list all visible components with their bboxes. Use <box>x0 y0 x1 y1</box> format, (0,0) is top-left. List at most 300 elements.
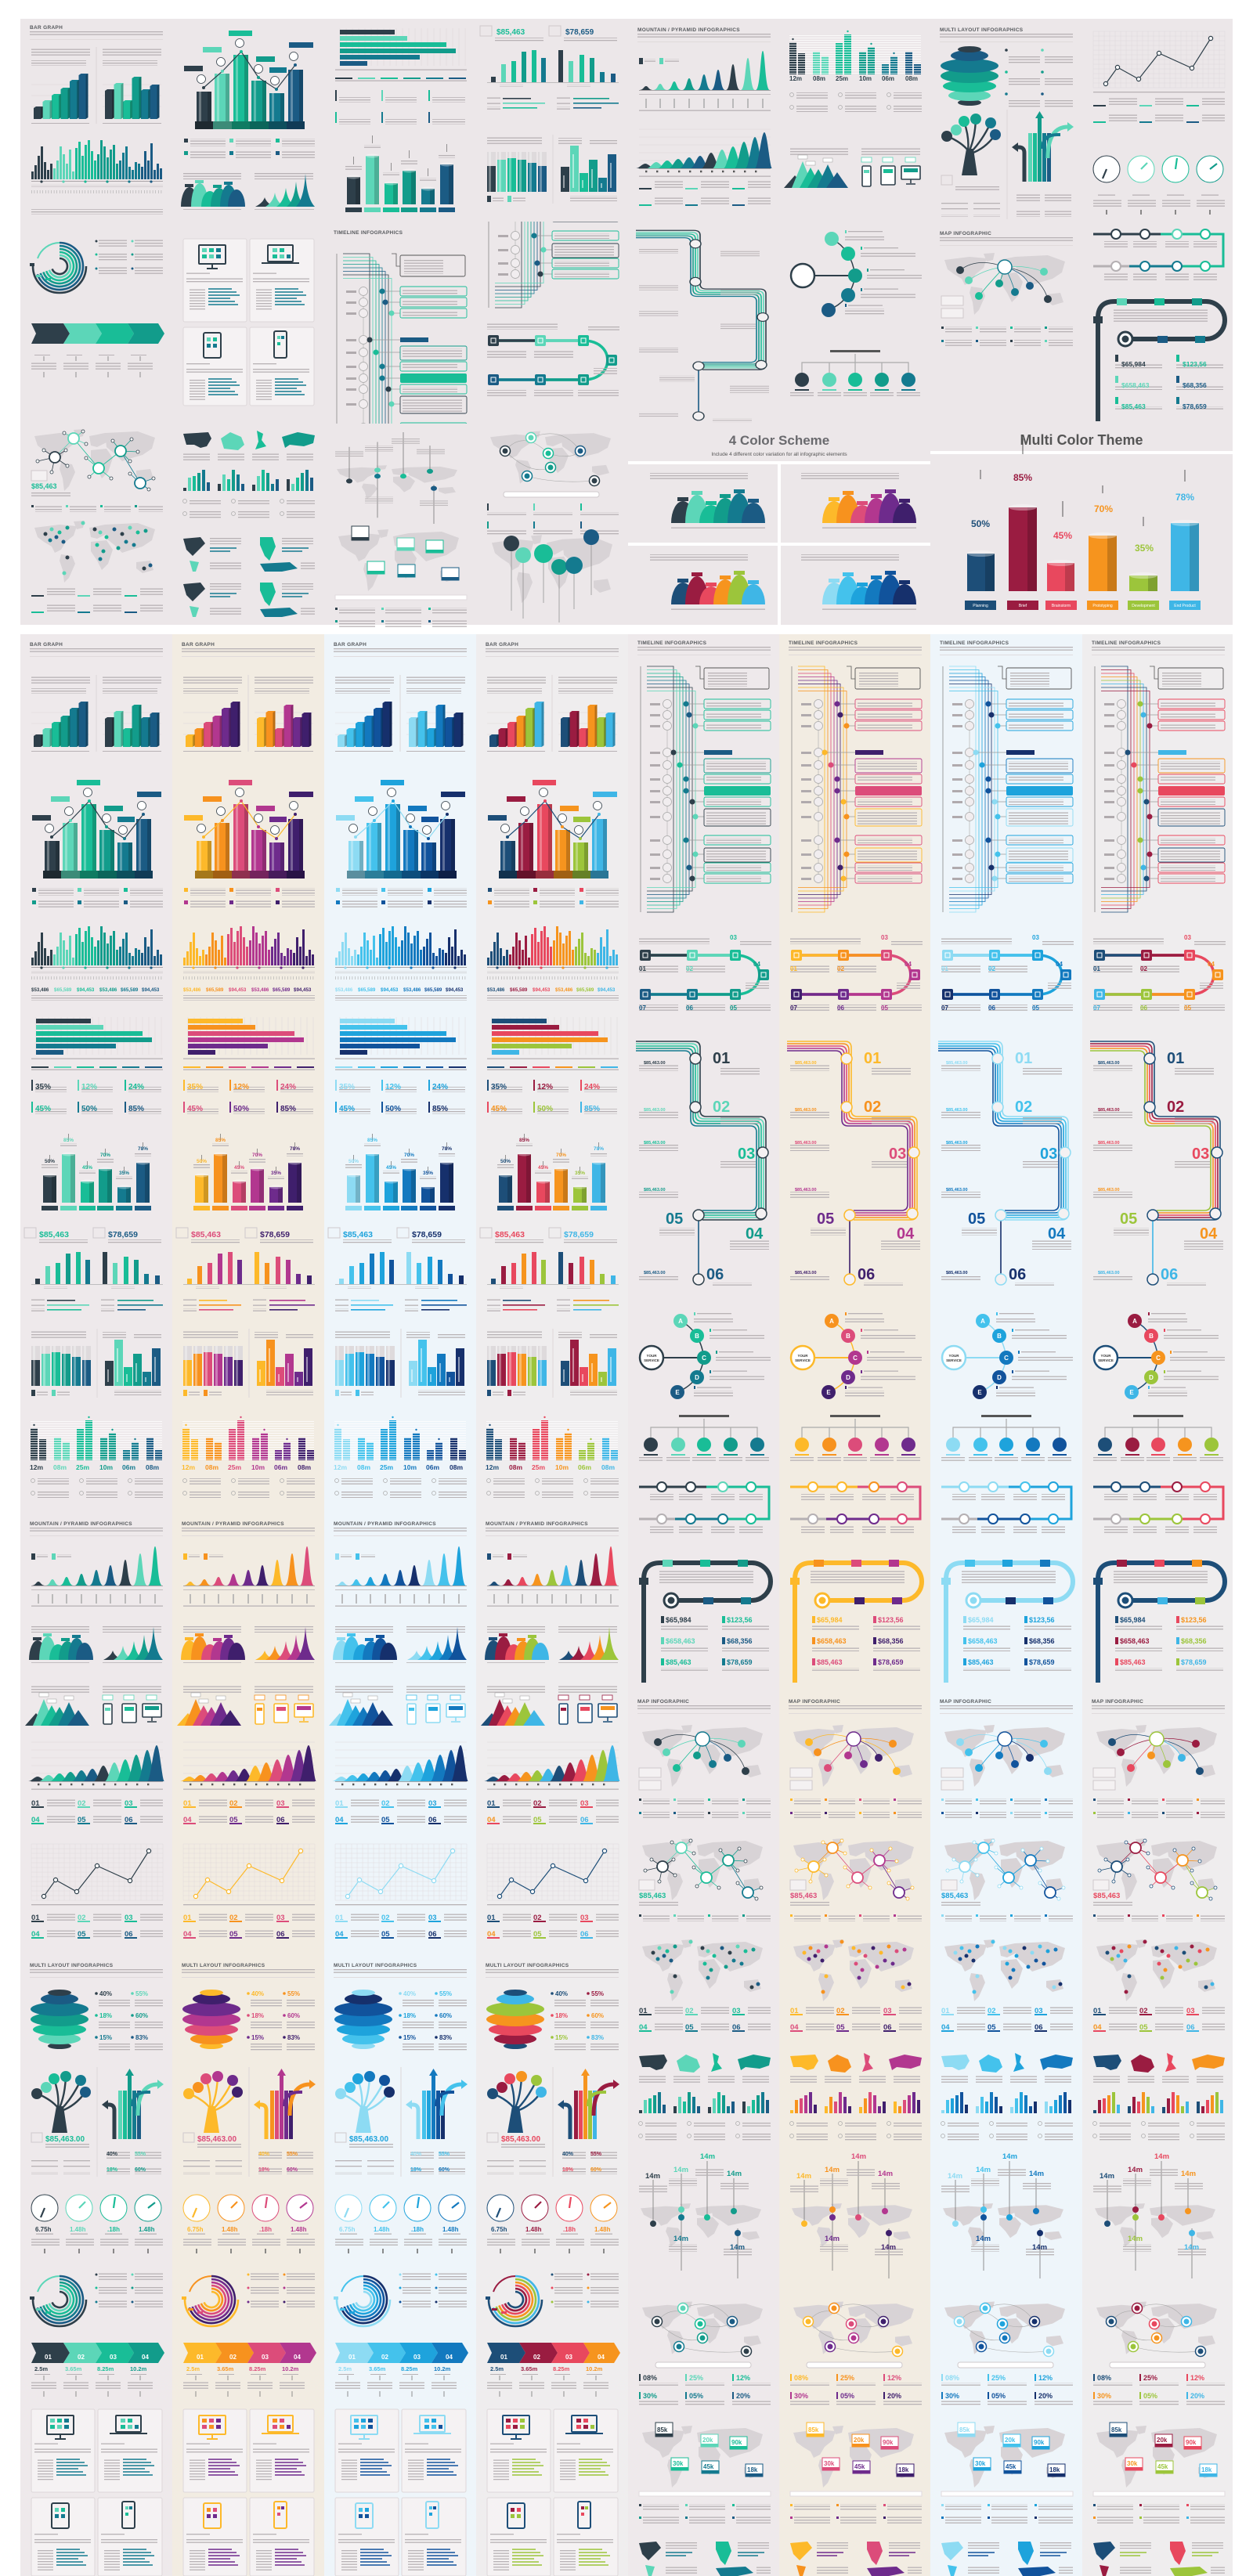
map tag values: 20k <box>854 2437 865 2444</box>
category numbers: 05 <box>836 2023 845 2032</box>
preview: concentric arcs <box>30 240 163 293</box>
map tag values: 18k <box>898 2466 909 2473</box>
chart: mountain range <box>180 1742 316 1790</box>
chart: process pipeline <box>639 937 771 1012</box>
preview network value: $85,463 <box>31 482 57 490</box>
equalizer labels: 08m <box>601 1463 615 1471</box>
category numbers: 03 <box>428 1799 437 1808</box>
chart: tree and arrows <box>487 2067 619 2177</box>
chevron values: 2.5m <box>490 2365 504 2372</box>
tree value: $85,463.00 <box>197 2135 237 2144</box>
pipeline numbers: 01 <box>639 965 646 972</box>
column backgrounds <box>20 634 1233 2576</box>
roadmap numbers: 03 <box>1040 1145 1057 1163</box>
chart: money bars <box>328 1228 467 1311</box>
category numbers: 03 <box>580 1799 589 1808</box>
lantern values: 40% <box>403 1990 416 1997</box>
chart: gauges <box>183 2195 315 2253</box>
category numbers: 05 <box>229 1816 238 1824</box>
category numbers: 06 <box>883 2023 892 2032</box>
tree value: $85,463.00 <box>349 2135 388 2144</box>
heading: bar graph: BAR GRAPH <box>334 642 367 648</box>
preview: mountain intro <box>637 33 771 42</box>
pin labels: 14m <box>796 2172 811 2181</box>
lantern values: 55% <box>135 1990 148 1997</box>
heading: map: MAP INFOGRAPHIC <box>637 1699 689 1705</box>
map tag values: 20k <box>1157 2437 1168 2444</box>
heading: multi layout: MULTI LAYOUT INFOGRAPHICS <box>30 1963 114 1968</box>
chart: cylinders <box>193 1134 303 1210</box>
heading: map preview: MAP INFOGRAPHIC <box>940 231 991 236</box>
lantern values: 83% <box>287 2034 300 2041</box>
heading: bar graph: BAR GRAPH <box>30 642 63 648</box>
map tag values: 90k <box>1034 2439 1045 2446</box>
percentage values: 50% <box>385 1105 401 1113</box>
flight percentages: 25% <box>1143 2374 1157 2382</box>
panel: warm dome chart <box>801 473 916 529</box>
pipeline numbers: 02 <box>686 965 693 972</box>
heading: mountain: MOUNTAIN / PYRAMID INFOGRAPHICS <box>182 1521 284 1527</box>
values row: $53,486 <box>555 987 573 993</box>
equalizer labels: 08m <box>357 1463 370 1471</box>
arrow values: 55% <box>590 2152 602 2157</box>
chart: continents <box>941 2542 1073 2576</box>
category numbers: 06 <box>1035 2023 1043 2032</box>
category numbers: 04 <box>31 1816 40 1824</box>
chart: 3D bars <box>183 675 313 752</box>
money values: $85,463 <box>39 1230 69 1239</box>
preview: bubble map <box>492 529 612 622</box>
preview equalizer labels: 08m <box>813 75 825 82</box>
cylinder percentages: 85% <box>63 1138 74 1143</box>
arrow values: 40% <box>410 2152 422 2157</box>
category numbers: 05 <box>381 1930 390 1939</box>
money values: $85,463 <box>191 1230 221 1239</box>
chart: network map <box>790 1838 922 1921</box>
roadmap numbers: 05 <box>1120 1210 1137 1228</box>
category numbers: 05 <box>533 1930 542 1939</box>
map tag values: 45k <box>1006 2463 1016 2470</box>
chevron values: 8.25m <box>401 2365 418 2372</box>
money values: $78,659 <box>108 1230 138 1239</box>
values row: $53,486 <box>403 987 421 993</box>
preview equalizer labels: 06m <box>882 75 894 82</box>
chart: 85k map <box>639 2423 771 2524</box>
chart: flight map <box>639 2302 771 2405</box>
pin labels: 14m <box>948 2172 962 2181</box>
timeline intro <box>637 646 771 655</box>
pipeline numbers: 07 <box>941 1005 948 1012</box>
chart: pillar callouts <box>32 780 163 908</box>
percentage values: 12% <box>537 1083 553 1091</box>
values row: $94,453 <box>598 987 616 993</box>
category numbers: 04 <box>335 1930 344 1939</box>
lantern values: 60% <box>135 2012 148 2019</box>
pipeline numbers: 04 <box>1208 961 1215 968</box>
chart: equalizer <box>334 1416 467 1498</box>
equalizer labels: 12m <box>334 1463 347 1471</box>
roadmap values: $85,463.00 <box>946 1061 968 1066</box>
chart: track <box>1093 1560 1225 1683</box>
category numbers: 04 <box>1093 2023 1102 2032</box>
panel: teal dome chart <box>650 473 765 529</box>
track values: $65,984 <box>666 1616 691 1624</box>
category numbers: 02 <box>381 1799 390 1808</box>
chart: vertical timeline <box>943 666 1073 912</box>
gauge values: 1.48h <box>594 2226 611 2233</box>
flight percentages: 12% <box>1038 2374 1053 2382</box>
preview: money tree and arrows <box>941 110 1074 219</box>
roadmap numbers: 06 <box>1009 1266 1026 1283</box>
lantern values: 60% <box>287 2012 300 2019</box>
preview: multi layout intro <box>940 33 1073 42</box>
preview equalizer labels: 12m <box>789 75 802 82</box>
chart: 85k map <box>1093 2423 1225 2524</box>
intro text <box>182 648 315 657</box>
chart: process pipeline <box>790 937 923 1012</box>
equalizer labels: 12m <box>486 1463 499 1471</box>
track values: $85,463 <box>817 1658 843 1666</box>
service letters: B <box>846 1333 850 1340</box>
preview: continents <box>183 537 315 572</box>
category numbers: 01 <box>1093 2007 1102 2015</box>
percentage values: 85% <box>280 1105 296 1113</box>
pin labels: 14m <box>1181 2170 1196 2178</box>
network value: $85,463 <box>941 1892 968 1900</box>
service letters: E <box>1129 1389 1134 1396</box>
lantern values: 40% <box>99 1990 112 1997</box>
percentage grid <box>31 1080 161 1114</box>
pipeline numbers: 05 <box>730 1005 737 1012</box>
percentage values: 12% <box>81 1083 97 1091</box>
multi intro <box>30 1968 163 1978</box>
values row: $53,486 <box>31 987 49 993</box>
pin labels: 14m <box>645 2172 660 2181</box>
panel: column 3 blue charts <box>328 642 468 2576</box>
chart: pin map <box>639 2161 761 2278</box>
chart: horizontal bars <box>335 1017 467 1071</box>
category numbers: 02 <box>836 2007 845 2015</box>
percentage grid <box>335 1080 465 1114</box>
preview: team hierarchy <box>790 350 920 397</box>
chart: snake roadmap <box>636 1041 769 1287</box>
pin labels: 14m <box>1184 2243 1199 2252</box>
percentage values: 24% <box>432 1083 448 1091</box>
equalizer labels: 25m <box>76 1463 89 1471</box>
gauge values: 1.48h <box>374 2226 390 2233</box>
pipeline numbers: 03 <box>881 934 888 941</box>
chart: lantern <box>486 1990 619 2051</box>
values row: $53,486 <box>251 987 269 993</box>
heading: map: MAP INFOGRAPHIC <box>789 1699 840 1705</box>
category numbers: 03 <box>1186 2007 1195 2015</box>
categories <box>31 1799 163 1824</box>
chart: device mountains <box>25 1686 161 1726</box>
equalizer labels: 06m <box>578 1463 591 1471</box>
category numbers: 04 <box>183 1930 192 1939</box>
chevron labels: 03 <box>565 2354 572 2361</box>
lantern values: 15% <box>555 2034 568 2041</box>
equalizer labels: 08m <box>146 1463 159 1471</box>
chart: horizontal bars <box>31 1017 163 1071</box>
chart: lantern <box>182 1990 315 2051</box>
pin labels: 14m <box>1100 2172 1114 2181</box>
pipeline numbers: 05 <box>881 1005 888 1012</box>
chart: pin map <box>941 2161 1063 2278</box>
category numbers: 02 <box>533 1799 542 1808</box>
heading: timeline: TIMELINE INFOGRAPHICS <box>1092 640 1161 646</box>
chart: track <box>639 1560 771 1683</box>
network value: $85,463 <box>1093 1892 1120 1900</box>
lantern values: 60% <box>439 2012 452 2019</box>
chart: pillar callouts <box>488 780 619 908</box>
arrow values: 60% <box>439 2167 450 2173</box>
panel: blue dome chart <box>801 554 916 611</box>
preview equalizer labels: 10m <box>859 75 872 82</box>
roadmap numbers: 03 <box>889 1145 906 1163</box>
panel: column 5 teal timelines and maps <box>636 640 771 2576</box>
intro text <box>486 648 619 657</box>
category numbers: 03 <box>276 1914 285 1922</box>
service labels: YOUR <box>948 1354 959 1358</box>
lantern values: 55% <box>287 1990 300 1997</box>
cylinder percentages: 50% <box>348 1159 359 1164</box>
pin labels: 14m <box>825 2235 840 2243</box>
arrow values: 18% <box>562 2167 574 2173</box>
service labels: SERVICE <box>1098 1358 1114 1362</box>
arrow values: 60% <box>287 2167 298 2173</box>
values row: $94,453 <box>77 987 95 993</box>
map tag values: 85k <box>808 2426 819 2433</box>
cylinder percentages: 70% <box>556 1153 566 1158</box>
mountain intro <box>486 1527 619 1536</box>
gauge values: 6.75h <box>187 2226 204 2233</box>
roadmap values: $85,463.00 <box>946 1141 968 1145</box>
heading: mountain preview: MOUNTAIN / PYRAMID INFOGRAPHICS <box>637 27 740 33</box>
percentage values: 35% <box>35 1083 51 1091</box>
roadmap numbers: 04 <box>746 1225 764 1243</box>
heading: mountain: MOUNTAIN / PYRAMID INFOGRAPHICS <box>486 1521 588 1527</box>
preview: phase chevrons <box>31 323 164 377</box>
pipeline numbers: 06 <box>686 1005 693 1012</box>
pin labels: 14m <box>878 2170 893 2178</box>
equalizer labels: 10m <box>403 1463 417 1471</box>
chevron labels: 01 <box>45 2354 52 2361</box>
chart: horizontal bars <box>183 1017 315 1071</box>
mountain intro <box>182 1527 315 1536</box>
pin labels: 14m <box>673 2166 688 2174</box>
lantern values: 83% <box>135 2034 148 2041</box>
chart: dense bars <box>183 926 315 1001</box>
panel: column 4 multi-color charts <box>480 642 620 2576</box>
chart: tree and arrows <box>31 2067 164 2177</box>
chart: dense bars <box>31 926 163 1001</box>
category numbers: 03 <box>580 1914 589 1922</box>
preview: device panels <box>183 239 314 406</box>
chart: 85k map <box>941 2423 1073 2524</box>
roadmap values: $85,463.00 <box>946 1108 968 1113</box>
preview: percentage grid <box>335 90 465 124</box>
preview: lantern discs <box>941 46 1073 107</box>
chart: tree and arrows <box>335 2067 468 2177</box>
roadmap numbers: 06 <box>706 1266 724 1283</box>
money values: $85,463 <box>495 1230 525 1239</box>
chart: 3D bars <box>487 675 617 752</box>
pipeline numbers: 03 <box>1032 934 1039 941</box>
service labels: SERVICE <box>644 1358 659 1362</box>
service labels: YOUR <box>1100 1354 1111 1358</box>
chart: dense bars <box>335 926 467 1001</box>
pin labels: 14m <box>730 2243 745 2252</box>
category numbers: 01 <box>639 2007 648 2015</box>
gauge values: 1.48h <box>70 2226 86 2233</box>
arrow values: 18% <box>258 2167 270 2173</box>
flight percentages: 05% <box>1143 2392 1157 2400</box>
heading: multi layout: MULTI LAYOUT INFOGRAPHICS <box>182 1963 265 1968</box>
chart: dot map <box>639 1939 771 2032</box>
roadmap values: $85,463.00 <box>946 1271 968 1275</box>
lantern values: 55% <box>591 1990 604 1997</box>
chart: device mountains <box>481 1686 617 1726</box>
roadmap numbers: 03 <box>1192 1145 1209 1163</box>
chart: multi color cylinders: 35% <box>1135 543 1154 554</box>
service letters: C <box>702 1355 706 1362</box>
service letters: D <box>695 1374 699 1381</box>
map intro <box>1092 1705 1225 1714</box>
equalizer labels: 10m <box>555 1463 569 1471</box>
cylinder percentages: 78% <box>594 1146 604 1152</box>
chart: snake roadmap <box>938 1041 1071 1287</box>
service letters: E <box>675 1389 680 1396</box>
category numbers: 06 <box>125 1816 133 1824</box>
chart: cylinders <box>42 1134 151 1210</box>
gauge values: 6.75h <box>491 2226 507 2233</box>
chart: device mountains <box>177 1686 313 1726</box>
chart: process pipeline <box>941 937 1074 1012</box>
chart: network map <box>1093 1838 1225 1921</box>
flight percentages: 12% <box>736 2374 750 2382</box>
equalizer labels: 10m <box>99 1463 113 1471</box>
service letters: B <box>1149 1333 1154 1340</box>
track values: $85,463 <box>968 1658 994 1666</box>
track values: $78,659 <box>878 1658 904 1666</box>
percentage values: 12% <box>233 1083 249 1091</box>
percentage values: 24% <box>128 1083 144 1091</box>
preview: country bars <box>183 431 315 518</box>
equalizer labels: 06m <box>426 1463 439 1471</box>
gauge values: .18h <box>411 2226 424 2233</box>
categories <box>183 1799 315 1824</box>
device panels <box>183 2409 314 2576</box>
track values: $658,463 <box>1120 1637 1150 1645</box>
track values: $123,56 <box>727 1616 753 1624</box>
preview: 85k map <box>335 526 467 627</box>
chart: vertical timeline <box>641 666 771 912</box>
chevron values: 2.5m <box>34 2365 48 2372</box>
roadmap values: $85,463.00 <box>644 1141 666 1145</box>
values row: $53,486 <box>487 987 505 993</box>
track values: $658,463 <box>968 1637 998 1645</box>
category numbers: 04 <box>639 2023 648 2032</box>
arrow values: 55% <box>287 2152 298 2157</box>
pin labels: 14m <box>976 2166 991 2174</box>
chart: track <box>790 1560 922 1683</box>
equalizer labels: 25m <box>228 1463 241 1471</box>
preview: dome mountains <box>181 171 315 211</box>
cylinder percentages: 85% <box>519 1138 529 1143</box>
pin labels: 14m <box>1154 2152 1169 2161</box>
equalizer labels: 10m <box>251 1463 265 1471</box>
multi intro <box>486 1968 619 1978</box>
multi color theme title: Multi Color Theme <box>1020 432 1143 448</box>
category numbers: 05 <box>533 1816 542 1824</box>
flight percentages: 30% <box>643 2392 657 2400</box>
preview: categories <box>1093 97 1225 123</box>
service letters: A <box>980 1318 985 1325</box>
map tag values: 20k <box>702 2437 713 2444</box>
track values: $85,463 <box>1120 1658 1146 1666</box>
cylinder percentages: 85% <box>367 1138 377 1143</box>
pipeline numbers: 06 <box>1140 1005 1147 1012</box>
category numbers: 02 <box>229 1799 238 1808</box>
category numbers: 06 <box>276 1816 285 1824</box>
percentage values: 50% <box>233 1105 249 1113</box>
roadmap numbers: 02 <box>1015 1099 1032 1116</box>
values row: $65,589 <box>273 987 291 993</box>
preview: dense bar chart <box>31 140 163 215</box>
chart: office map <box>941 1725 1073 1819</box>
chart: multi color cylinders: 70% <box>1094 503 1113 514</box>
service letters: C <box>1004 1355 1009 1362</box>
cylinder percentages: 50% <box>500 1159 511 1164</box>
percentage values: 45% <box>187 1105 203 1113</box>
category numbers: 03 <box>125 1914 133 1922</box>
service letters: D <box>846 1374 850 1381</box>
roadmap values: $85,463.00 <box>946 1188 968 1192</box>
flight percentages: 30% <box>794 2392 808 2400</box>
roadmap numbers: 01 <box>1167 1050 1184 1067</box>
cylinder percentages: 45% <box>386 1165 396 1171</box>
percentage values: 45% <box>491 1105 507 1113</box>
map tag values: 20k <box>1005 2437 1016 2444</box>
flight percentages: 25% <box>840 2374 854 2382</box>
map tag values: 45k <box>854 2463 865 2470</box>
chevron labels: 01 <box>197 2354 204 2361</box>
gauge values: 1.48h <box>525 2226 542 2233</box>
chevron values: 10.2m <box>586 2365 603 2372</box>
lantern values: 83% <box>439 2034 452 2041</box>
values row: $94,453 <box>229 987 247 993</box>
money values: $85,463 <box>343 1230 373 1239</box>
chevron values: 8.25m <box>97 2365 114 2372</box>
preview equalizer labels: 08m <box>905 75 918 82</box>
chart: track <box>941 1560 1073 1683</box>
service letters: A <box>678 1318 683 1325</box>
chart: continents <box>639 2542 771 2576</box>
track values: $65,984 <box>1120 1616 1146 1624</box>
roadmap numbers: 05 <box>666 1210 683 1228</box>
track values: $68,356 <box>878 1637 904 1645</box>
heading: bar graph: BAR GRAPH <box>486 642 518 648</box>
preview track money values: $65,984 <box>1121 360 1146 368</box>
chart: cylinders <box>497 1134 607 1210</box>
chart: tubes <box>335 1329 465 1398</box>
chart: multi color cylinders: Development <box>1132 604 1155 608</box>
heading: mountain: MOUNTAIN / PYRAMID INFOGRAPHICS <box>334 1521 436 1527</box>
category numbers: 02 <box>533 1914 542 1922</box>
chart: flight map <box>941 2302 1073 2405</box>
chart: country bars <box>1093 2053 1225 2141</box>
